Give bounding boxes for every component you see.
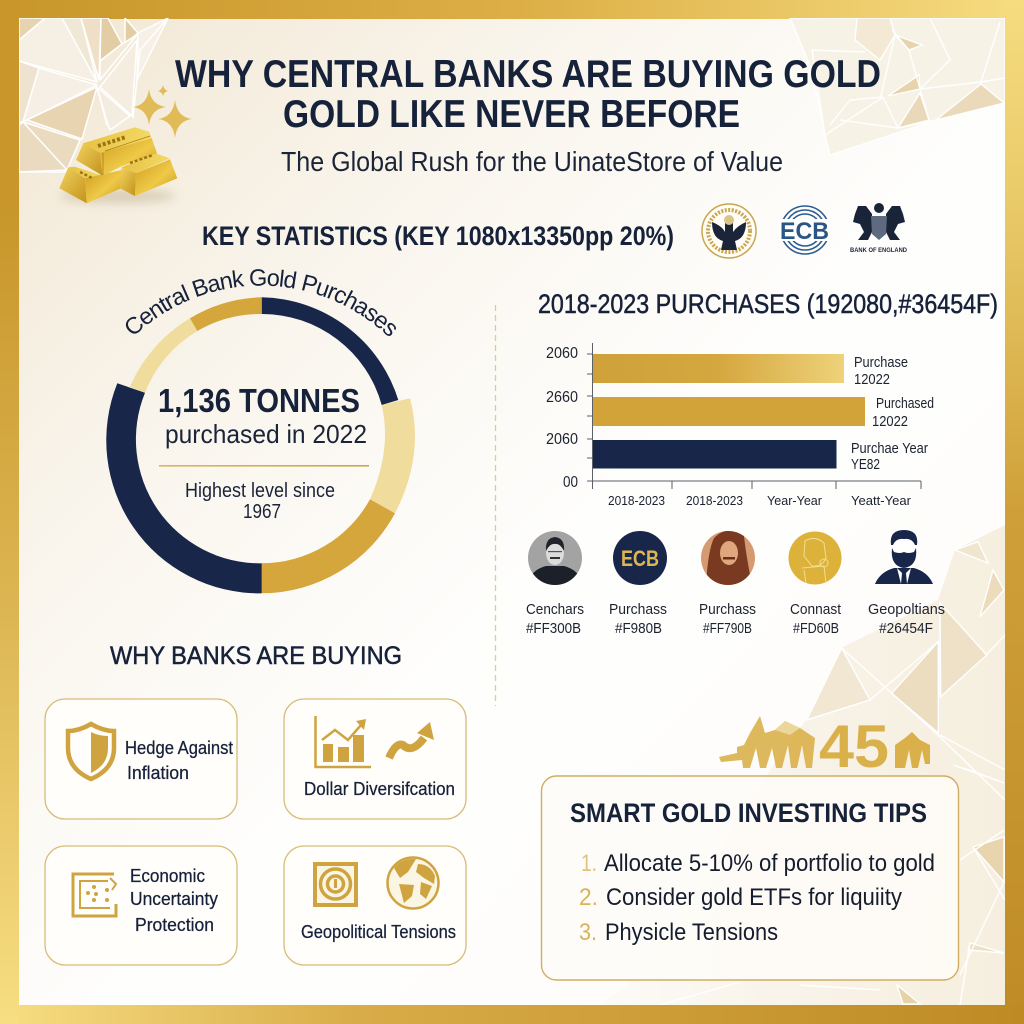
icon: rising bar chart xyxy=(316,716,371,767)
y axis labels: 2660 xyxy=(546,389,578,406)
icon: ECB logo: ECB xyxy=(780,218,829,245)
tip 2: 2. xyxy=(579,884,598,911)
avatar: centchars portrait xyxy=(528,531,582,585)
icon: bank of england crest xyxy=(850,203,907,254)
chart axes xyxy=(587,343,921,489)
y axis labels: 2060 xyxy=(546,345,578,362)
card label: Dollar Diversifcation xyxy=(304,779,455,799)
bar: purchased 12022 xyxy=(593,397,865,426)
title xyxy=(175,53,881,136)
donut centre note: Highest level since xyxy=(185,480,335,502)
avatar captions: Geopoltians xyxy=(868,601,945,618)
section heading: why banks are buying: WHY BANKS ARE BUYING xyxy=(110,642,402,670)
tip 1: Allocate 5-10% of portfolio to gold xyxy=(604,850,935,877)
tips heading: SMART GOLD INVESTING TIPS xyxy=(570,798,927,828)
tip 3: 3. xyxy=(579,919,597,946)
card label: Hedge Against xyxy=(125,738,233,758)
bar value labels xyxy=(851,355,934,473)
panel: smart gold investing tips xyxy=(542,776,958,980)
donut centre stat: 1,136 TONNES xyxy=(158,382,360,419)
card label: Uncertainty xyxy=(130,889,218,909)
title: WHY CENTRAL BANKS ARE BUYING GOLD xyxy=(175,53,881,96)
donut centre note xyxy=(185,480,335,523)
avatar captions xyxy=(526,601,945,637)
icon: gold bars xyxy=(59,127,177,203)
gold skyline with 45 figure xyxy=(719,713,930,780)
donut centre caption: purchased in 2022 xyxy=(165,419,367,449)
donut segments xyxy=(106,297,415,593)
bar value labels: 12022 xyxy=(854,372,890,388)
faceted background: bottom right xyxy=(663,525,1005,1005)
card label: Inflation xyxy=(127,763,189,783)
card label: Protection xyxy=(135,915,214,935)
y axis labels xyxy=(546,345,578,491)
bar value labels: Purchae Year xyxy=(851,441,928,457)
icon: sparkles xyxy=(133,85,192,138)
card: economic uncertainty protection xyxy=(45,846,237,965)
avatar: bearded man in suit xyxy=(875,530,933,584)
title: GOLD LIKE NEVER BEFORE xyxy=(283,93,740,136)
chart: donut of central bank gold purchases xyxy=(106,269,415,594)
bar chart: purchases xyxy=(546,343,934,508)
avatar captions: Connast xyxy=(790,601,842,618)
card: dollar diversification xyxy=(284,699,466,819)
faceted background: top left xyxy=(19,18,168,172)
bar value labels: Purchase xyxy=(854,355,908,371)
avatar: gold line portrait xyxy=(788,532,842,584)
bar value labels: 12022 xyxy=(872,414,908,430)
icon: globe xyxy=(388,858,438,908)
bar value labels: YE82 xyxy=(851,457,880,473)
donut label: Central Bank Gold Purchases xyxy=(126,269,396,336)
card label: Geopolitical Tensions xyxy=(301,922,456,942)
avatar captions: Purchass xyxy=(609,601,667,618)
card label: Economic xyxy=(130,866,205,886)
icon: shield xyxy=(68,724,114,779)
avatar captions: #26454F xyxy=(879,620,933,637)
avatar: long-haired portrait xyxy=(701,530,755,585)
icon: vault xyxy=(315,864,356,905)
x axis labels: 2018-2023 xyxy=(686,493,743,508)
key statistics heading: KEY STATISTICS (KEY 1080x13350pp 20%) xyxy=(202,221,674,251)
y axis labels: 00 xyxy=(563,474,578,491)
gold skyline with 45 figure: 45 xyxy=(819,713,889,780)
x axis labels: 2018-2023 xyxy=(608,493,665,508)
avatar captions: Purchass xyxy=(699,601,756,618)
avatar captions: #FF790B xyxy=(703,620,752,637)
icon: squiggle arrow xyxy=(389,722,434,758)
card label xyxy=(130,866,218,935)
card label xyxy=(125,738,233,783)
icon: federal reserve seal xyxy=(702,204,756,258)
avatar captions: #F980B xyxy=(615,620,662,637)
tip 1: 1. xyxy=(581,850,597,877)
avatar: ECB badge xyxy=(613,531,667,585)
icon: ECB logo xyxy=(779,206,831,254)
avatar captions: #FF300B xyxy=(526,620,581,637)
icon: patterned square xyxy=(73,874,116,916)
bar value labels: Purchased xyxy=(876,396,934,412)
tip 2: Consider gold ETFs for liquiity xyxy=(606,884,902,911)
avatar: ECB badge: ECB xyxy=(621,546,659,571)
x axis labels: Yeatt-Year xyxy=(851,493,912,508)
bar: purchae year xyxy=(593,440,836,468)
bar: purchase 12022 xyxy=(593,354,844,383)
avatar captions: #FD60B xyxy=(793,620,839,637)
card: geopolitical tensions xyxy=(284,846,466,965)
x axis labels: Year-Year xyxy=(767,493,823,508)
donut centre note: 1967 xyxy=(243,501,281,523)
y axis labels: 2060 xyxy=(546,431,578,448)
card: hedge against inflation xyxy=(45,699,237,819)
icon: bank of england crest: BANK OF ENGLAND xyxy=(850,247,907,254)
tip 3: Physicle Tensions xyxy=(605,919,778,946)
avatar captions: Cenchars xyxy=(526,601,584,618)
subtitle: The Global Rush for the UinateStore of Value xyxy=(281,146,783,177)
x axis labels xyxy=(608,493,912,508)
faceted background: top right xyxy=(790,18,1005,155)
